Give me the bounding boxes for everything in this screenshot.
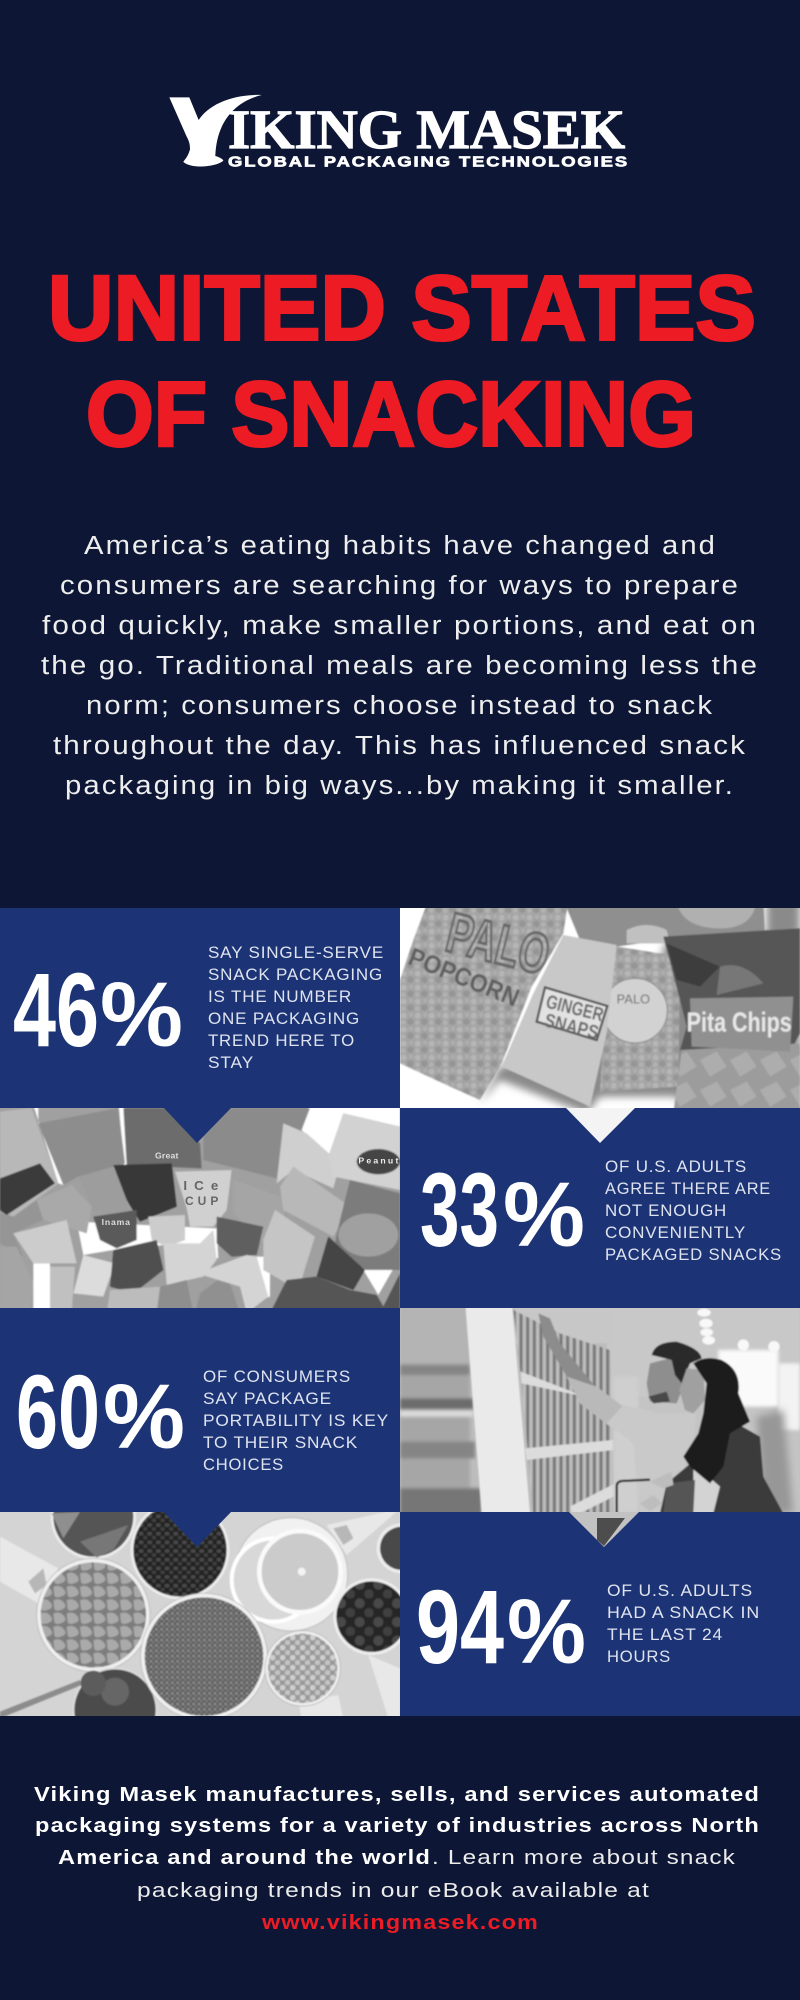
description: OF U.S. ADULTS — [605, 1157, 747, 1176]
pointer: 60% panel arrow — [163, 1511, 232, 1547]
footer text: . Learn more about snack — [432, 1846, 736, 1869]
description: THE LAST 24 — [607, 1625, 723, 1644]
description: PACKAGED SNACKS — [605, 1245, 782, 1264]
photo: snack bags (popcorn, ginger snaps, pita chips): POPCORN — [404, 943, 523, 1013]
description: TREND HERE TO — [208, 1031, 355, 1050]
number 46 percent: 46 — [13, 952, 99, 1069]
intro paragraph: packaging in big ways...by making it smaller. — [65, 772, 735, 800]
lentils bowl — [141, 1593, 267, 1720]
description — [208, 943, 384, 1072]
description: HOURS — [607, 1647, 671, 1666]
photo: snack bags (popcorn, ginger snaps, pita chips) — [400, 901, 800, 1108]
photo: bowls of snacks — [0, 1512, 400, 1716]
logo: Viking Masek — [169, 95, 629, 170]
description: TO THEIR SNACK — [203, 1433, 358, 1452]
photo: snack bags (popcorn, ginger snaps, pita chips): GINGER — [544, 992, 605, 1026]
intro paragraph: the go. Traditional meals are becoming less the — [41, 652, 759, 680]
intro paragraph — [41, 532, 759, 800]
panel: 33% stat — [400, 1108, 800, 1308]
photo: pile of flexible snack pouches: Peanut — [358, 1155, 398, 1165]
raspberries bowl — [72, 1667, 158, 1753]
website link: www.vikingmasek.com — [261, 1911, 539, 1934]
product shelves — [513, 1310, 613, 1513]
icon: Viking horn V — [169, 95, 262, 167]
photo: snack bags (popcorn, ginger snaps, pita chips): PALO — [440, 901, 556, 988]
description: STAY — [208, 1053, 254, 1072]
photo: pile of flexible snack pouches: Inama — [102, 1217, 130, 1227]
description: AGREE THERE ARE — [605, 1179, 771, 1198]
title: UNITED STATES — [48, 258, 756, 360]
title: OF SNACKING — [86, 364, 696, 466]
footer text: packaging systems for a variety of industries across North — [35, 1814, 760, 1837]
pointer: white notch into 33% panel — [566, 1108, 635, 1143]
footer text: packaging trends in our eBook available at — [137, 1879, 650, 1902]
panel: 46% stat — [0, 908, 400, 1108]
intro paragraph: consumers are searching for ways to prepare — [60, 572, 740, 600]
footer text — [34, 1783, 760, 1934]
description: IS THE NUMBER — [208, 987, 352, 1006]
description: PORTABILITY IS KEY — [203, 1411, 389, 1430]
basket handle — [617, 1480, 650, 1513]
white pillar — [465, 1300, 530, 1513]
description — [203, 1367, 389, 1474]
description: NOT ENOUGH — [605, 1201, 727, 1220]
number 46 percent: % — [100, 964, 183, 1066]
soybeans bowl — [265, 1631, 340, 1706]
number 46 percent — [13, 952, 183, 1069]
orange slices bowl — [234, 1518, 348, 1631]
description: CONVENIENTLY — [605, 1223, 746, 1242]
description: OF CONSUMERS — [203, 1367, 351, 1386]
ceiling and background — [607, 1300, 800, 1400]
number 94 percent: 94 — [416, 1569, 504, 1686]
cherries bowl — [333, 1578, 410, 1655]
description: OF U.S. ADULTS — [607, 1581, 753, 1600]
photo: pile of flexible snack pouches: ICe — [183, 1178, 218, 1193]
description: HAD A SNACK IN — [607, 1603, 760, 1622]
number 60 percent: % — [103, 1366, 185, 1468]
panel: 94% stat — [400, 1512, 800, 1716]
description — [607, 1581, 760, 1666]
description — [605, 1157, 782, 1264]
photo fragment: basket seen through 94% arrow — [569, 1512, 639, 1547]
pointer: 46% panel arrow — [163, 1107, 232, 1143]
footer text: Viking Masek manufactures, sells, and services automated — [34, 1783, 760, 1806]
intro paragraph: throughout the day. This has influenced snack — [53, 732, 747, 760]
strawberries bowl — [51, 1474, 136, 1559]
number 33 percent: 33 — [420, 1152, 499, 1269]
logo tagline: GLOBAL PACKAGING TECHNOLOGIES — [228, 154, 629, 170]
coffee beans bowl — [131, 1501, 229, 1599]
walnuts bowl — [37, 1558, 150, 1672]
man — [538, 1313, 597, 1393]
photo: pile of flexible snack pouches — [0, 1108, 400, 1308]
number 94 percent — [416, 1569, 586, 1686]
woman — [660, 1423, 783, 1513]
title — [48, 258, 756, 466]
panel: 60% stat — [0, 1308, 400, 1512]
number 60 percent — [16, 1354, 185, 1471]
description: SNACK PACKAGING — [208, 965, 383, 984]
footer text: America and around the world — [58, 1846, 431, 1869]
number 33 percent: % — [503, 1164, 585, 1266]
number 60 percent: 60 — [16, 1354, 100, 1471]
intro paragraph: America’s eating habits have changed and — [84, 532, 717, 560]
top-right bowl — [377, 1523, 427, 1573]
number 94 percent: % — [507, 1581, 586, 1683]
description: CHOICES — [203, 1455, 284, 1474]
photo: couple shopping at shelf — [400, 1308, 800, 1512]
intro paragraph: food quickly, make smaller portions, and eat on — [42, 612, 758, 640]
description: ONE PACKAGING — [208, 1009, 360, 1028]
photo: snack bags (popcorn, ginger snaps, pita chips): PALO — [617, 992, 650, 1006]
description: SAY SINGLE-SERVE — [208, 943, 384, 962]
photo: snack bags (popcorn, ginger snaps, pita chips): SNAPS — [542, 1010, 601, 1044]
photo: pile of flexible snack pouches: CUP — [185, 1194, 218, 1208]
photo: pile of flexible snack pouches: Great — [155, 1150, 178, 1160]
logo wordmark: IKING MASEK — [228, 99, 625, 160]
description: SAY PACKAGE — [203, 1389, 332, 1408]
intro paragraph: norm; consumers choose instead to snack — [86, 692, 714, 720]
blurred left shelves — [400, 1300, 482, 1515]
